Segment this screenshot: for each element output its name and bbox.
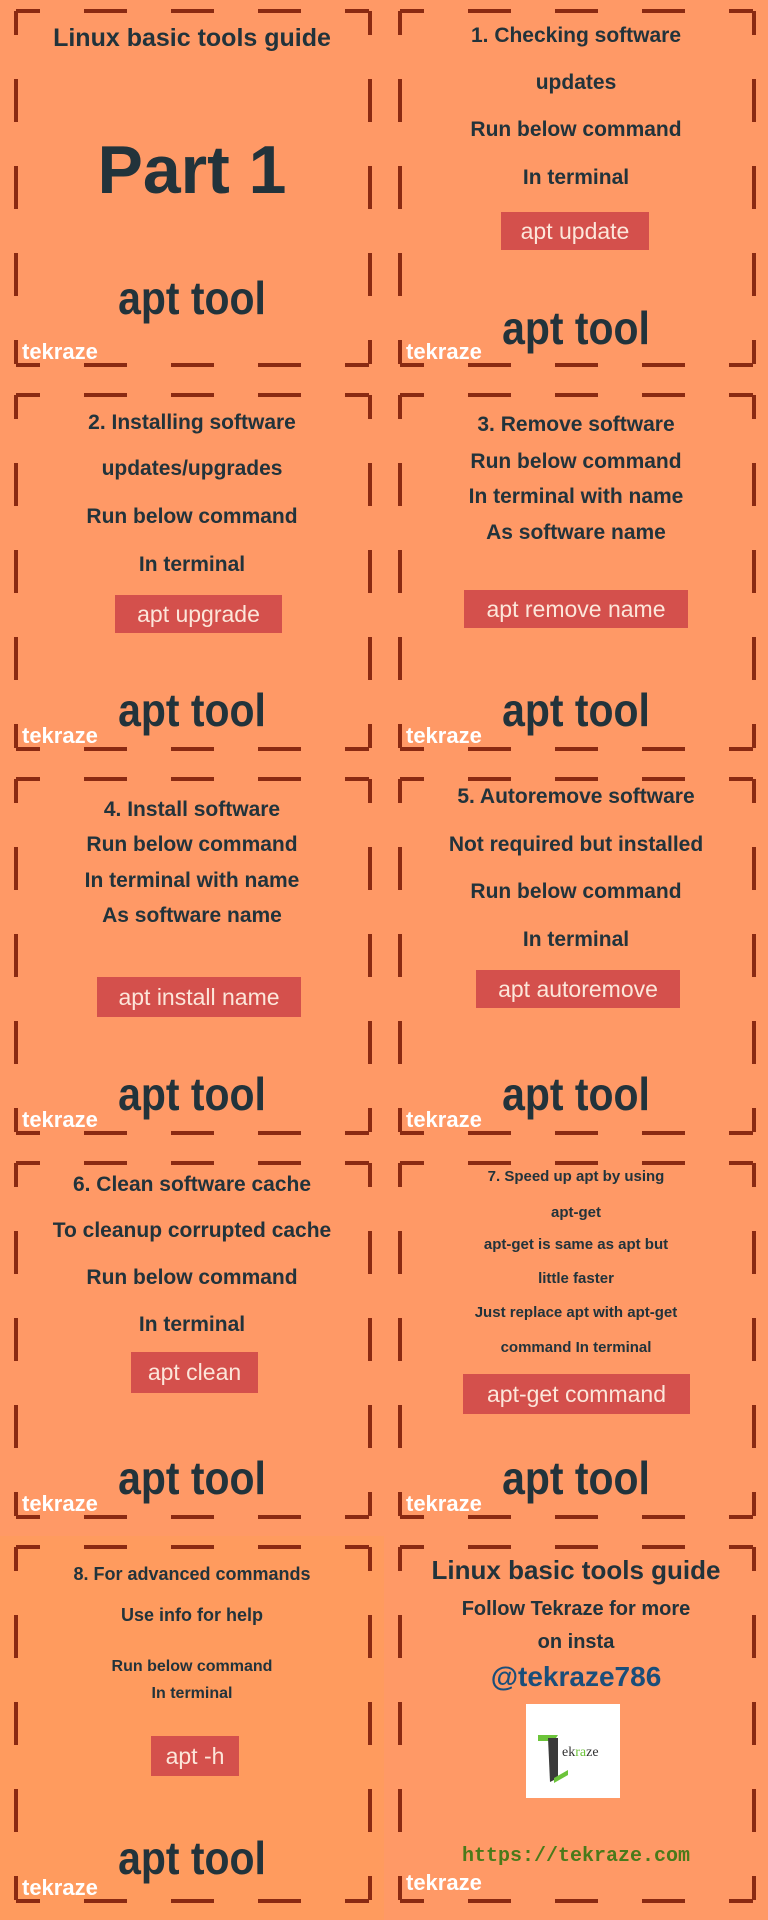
text block: Follow Tekraze for more — [462, 1598, 690, 1620]
panel: intro — [0, 0, 384, 384]
text block: Run below command — [470, 880, 682, 903]
text block: In terminal — [139, 1313, 245, 1336]
watermark: tekraze — [406, 1107, 482, 1132]
heading: apt tool: apt tool — [118, 1068, 266, 1120]
title: Linux basic tools guide — [432, 1555, 720, 1585]
command box — [131, 1352, 258, 1393]
panel: 3 remove — [384, 384, 768, 768]
command box — [115, 595, 282, 633]
text block: Run below command — [86, 505, 298, 528]
text block — [73, 1564, 311, 1702]
text block: 2. Installing software — [88, 411, 296, 434]
text block: updates — [536, 71, 616, 94]
text block: In terminal — [152, 1685, 232, 1702]
panel: 1 checking updates — [384, 0, 768, 384]
text block — [53, 1173, 331, 1336]
heading: apt tool: apt tool — [502, 1068, 650, 1120]
text block: 1. Checking software — [471, 24, 681, 47]
panel: 6 clean — [0, 1152, 384, 1536]
command box: apt install name — [118, 984, 280, 1010]
text block: Run below command — [470, 118, 682, 141]
text block: Run below command — [86, 1266, 298, 1289]
text block: 8. For advanced commands — [73, 1564, 311, 1584]
watermark: tekraze — [406, 339, 482, 364]
heading: apt tool: apt tool — [118, 1832, 266, 1884]
command box: apt remove name — [486, 596, 665, 622]
panel: 7 apt-get — [384, 1152, 768, 1536]
heading: apt tool: apt tool — [502, 1452, 650, 1504]
text block: 3. Remove software — [477, 413, 675, 436]
text block: In terminal — [523, 928, 629, 951]
text block: In terminal with name — [85, 869, 299, 892]
watermark: tekraze — [406, 723, 482, 748]
instagram handle: @tekraze786 — [491, 1661, 661, 1692]
text block: Just replace apt with apt-get — [475, 1304, 677, 1321]
text block: 6. Clean software cache — [73, 1173, 311, 1196]
icon: logo: ekraze — [562, 1745, 599, 1760]
watermark: tekraze — [22, 1491, 98, 1516]
text block: Run below command — [112, 1658, 272, 1675]
command box: apt upgrade — [137, 601, 260, 627]
panel: 2 upgrade — [0, 384, 384, 768]
command box — [151, 1736, 239, 1776]
text block: apt-get is same as apt but — [484, 1236, 668, 1253]
heading: apt tool: apt tool — [118, 1452, 266, 1504]
text block — [470, 24, 682, 189]
command box: apt update — [521, 218, 629, 244]
command box: apt autoremove — [498, 976, 658, 1002]
panel: 4 install — [0, 768, 384, 1152]
watermark: tekraze — [22, 723, 98, 748]
text block: on insta — [538, 1631, 614, 1653]
text block: As software name — [102, 904, 282, 927]
command box — [463, 1374, 690, 1414]
text block: 4. Install software — [104, 798, 280, 821]
watermark: tekraze — [406, 1870, 482, 1895]
command box — [97, 977, 301, 1017]
command box — [464, 590, 688, 628]
command box — [476, 970, 680, 1008]
text block: In terminal — [523, 166, 629, 189]
heading: apt tool: apt tool — [502, 302, 650, 354]
panel: follow — [384, 1536, 768, 1920]
heading: apt tool: apt tool — [118, 684, 266, 736]
text block — [462, 1598, 690, 1653]
heading: apt tool: apt tool — [118, 272, 266, 324]
panel: 5 autoremove — [384, 768, 768, 1152]
heading: apt tool: apt tool — [502, 684, 650, 736]
text block: command In terminal — [501, 1339, 651, 1356]
text block: Run below command — [470, 450, 682, 473]
text block: In terminal with name — [469, 485, 683, 508]
text block: As software name — [486, 521, 666, 544]
text block: In terminal — [139, 553, 245, 576]
text block: little faster — [538, 1270, 614, 1287]
text block — [469, 413, 683, 544]
command box: apt clean — [148, 1359, 241, 1385]
heading: Part 1: Part 1 — [98, 132, 286, 208]
watermark: tekraze — [22, 339, 98, 364]
text block — [85, 798, 299, 927]
text block — [475, 1168, 678, 1356]
text block: Use info for help — [121, 1605, 263, 1625]
text block: To cleanup corrupted cache — [53, 1219, 331, 1242]
text block — [449, 785, 703, 951]
text block: Not required but installed — [449, 833, 703, 856]
watermark: tekraze — [22, 1107, 98, 1132]
command box: apt-get command — [487, 1381, 666, 1407]
panel: 8 help — [0, 1536, 384, 1920]
text block: apt-get — [551, 1204, 601, 1221]
watermark: tekraze — [22, 1875, 98, 1900]
link: https://tekraze.com — [462, 1845, 690, 1868]
text block — [86, 411, 298, 576]
icon: logo — [526, 1704, 620, 1798]
text block: updates/upgrades — [102, 457, 282, 480]
watermark: tekraze — [406, 1491, 482, 1516]
command box: apt -h — [166, 1743, 224, 1769]
title: Linux basic tools guide — [53, 24, 331, 52]
text block: Run below command — [86, 833, 298, 856]
text block: 5. Autoremove software — [457, 785, 695, 808]
text block: 7. Speed up apt by using — [488, 1168, 664, 1185]
command box — [501, 212, 649, 250]
